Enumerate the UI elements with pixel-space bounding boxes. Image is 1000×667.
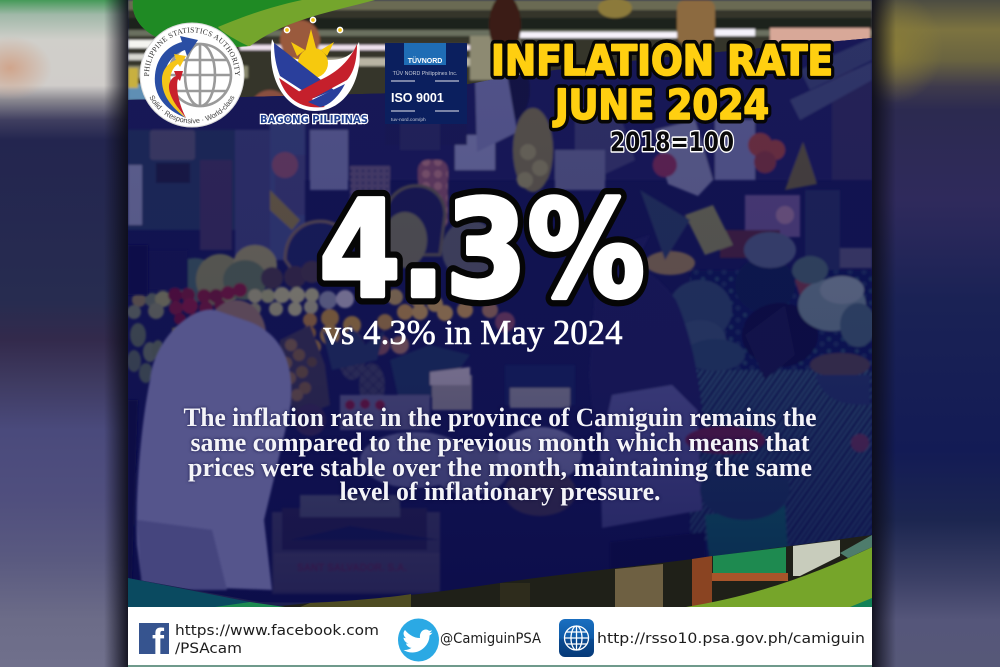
explanatory paragraph (184, 403, 816, 506)
icon: facebook: f (152, 621, 165, 662)
market photo: unshaded top band (128, 0, 872, 100)
icon: website globe (559, 619, 594, 657)
hanging bags, garlic, peppers (385, 38, 872, 196)
logo: TUV NORD ISO 9001: tuv-nord.com/ph (391, 117, 426, 123)
website link: http://rsso10.psa.gov.ph/camiguin (597, 631, 865, 647)
green wedge: bottom left (215, 602, 285, 607)
mound of melons (160, 244, 318, 306)
blurred background: right side panel (847, 0, 1000, 667)
comparison line: vs 4.3% in May 2024 (324, 313, 622, 352)
tub of herbs (685, 426, 869, 565)
blurred background: left side panel (0, 0, 128, 667)
green veg and eggplant, right stall (668, 232, 876, 565)
logo: Philippine Statistics Authority (140, 22, 244, 128)
cartons and baskets (296, 386, 583, 516)
rows of citrus and yellow fruit (127, 286, 515, 332)
lower bands (279, 78, 345, 107)
twitter handle: @CamiguinPSA (440, 631, 541, 647)
facebook link: https://www.facebook.com (175, 623, 379, 639)
PSA globe (169, 44, 231, 106)
teal wedge: bottom left (128, 578, 250, 607)
darkening tint over scene (128, 30, 872, 607)
headline rate: 4.3% (319, 172, 645, 328)
icon: twitter (398, 618, 439, 662)
light teal sliver above green curve (840, 535, 872, 558)
base year: 2018=100 (610, 127, 734, 158)
explanatory paragraph: prices were stable over the month, maintaining the same (188, 453, 812, 482)
title: INFLATION RATE (491, 36, 833, 85)
sun (291, 29, 334, 78)
wooden crate with faded lettering: SANT SALVADOR. S.A. (297, 562, 407, 574)
main poster (128, 0, 872, 667)
facebook link (175, 623, 379, 657)
icon: facebook (139, 621, 169, 662)
stall backdrop (128, 30, 872, 260)
green curve: bottom right (686, 547, 872, 607)
title: JUNE 2024 (552, 81, 769, 129)
wooden crate with faded lettering (272, 495, 440, 594)
explanatory paragraph: The inflation rate in the province of Camiguin remains the (184, 403, 816, 432)
blue wing (274, 43, 334, 98)
explanatory paragraph: same compared to the previous month which means that (190, 428, 810, 457)
oranges (302, 309, 409, 355)
market photo: unshaded bottom band (270, 535, 872, 607)
logo: TUV NORD ISO 9001 (385, 43, 467, 124)
apples (168, 283, 247, 338)
title: INFLATION RATE (491, 36, 833, 85)
stars (284, 17, 343, 33)
title (491, 36, 833, 158)
facebook link: /PSAcam (175, 641, 242, 657)
explanatory paragraph: level of inflationary pressure. (340, 477, 660, 506)
top green swoosh (133, 0, 375, 47)
wordmark: BAGONG PILIPINAS (260, 114, 368, 126)
logo: TUV NORD ISO 9001: TÜVNORD (408, 56, 442, 65)
footer bar (128, 607, 872, 667)
pineapples (322, 325, 469, 397)
asparagus (430, 367, 472, 410)
logo: Bagong Pilipinas (260, 17, 368, 126)
bending shopper (128, 290, 292, 591)
wicker basket and back stall (285, 186, 872, 280)
kiwi pile (280, 324, 330, 411)
PSA arrows (155, 36, 198, 118)
title: JUNE 2024 (552, 81, 769, 129)
headline rate: 4.3% (319, 172, 645, 328)
PSA name arc text: PHILIPPINE STATISTICS AUTHORITY (144, 27, 240, 76)
red wing (298, 44, 357, 100)
market photo: navy tinted scene (127, 30, 876, 607)
logo: TUV NORD ISO 9001: ISO 9001 (391, 91, 444, 105)
dark standing figure with dress (600, 296, 705, 550)
PSA motto arc text: Solid · Responsive · World-class (150, 96, 234, 124)
pears (127, 323, 164, 383)
dark green corner accent (850, 598, 872, 607)
logo: TUV NORD ISO 9001: TÜV NORD Philippines Inc. (393, 70, 457, 77)
